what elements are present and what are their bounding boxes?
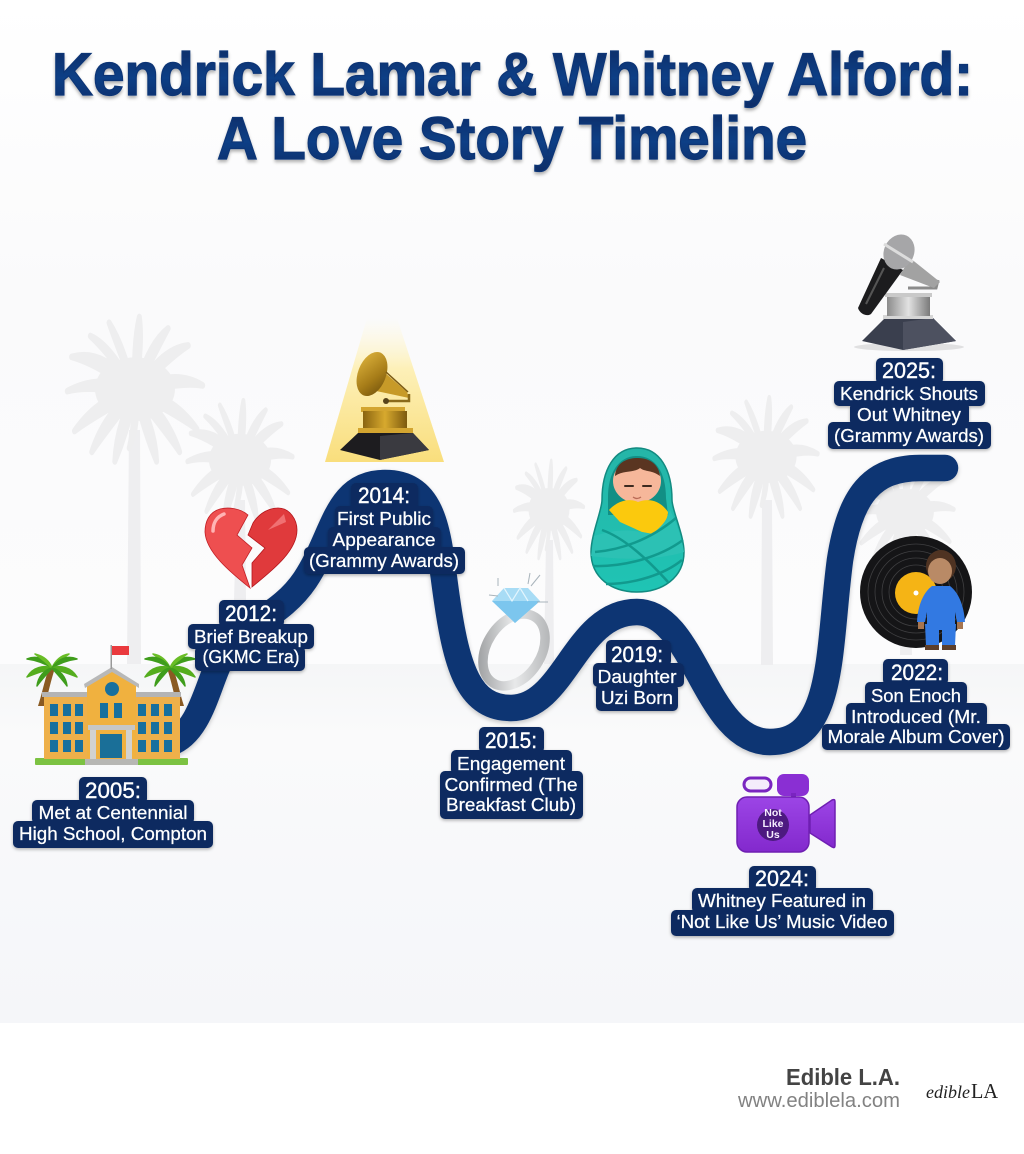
entrance portico [88, 725, 135, 730]
hood opening [608, 456, 668, 515]
label: 2019 [593, 640, 684, 711]
grass [35, 758, 188, 765]
child figure [917, 550, 965, 650]
badge text: Not [764, 807, 782, 819]
ring band [470, 603, 558, 697]
windows right [138, 704, 172, 752]
year: 2012: [225, 601, 277, 626]
badge text: Like [762, 818, 784, 830]
badge text: Us [766, 829, 780, 841]
pyramid base [862, 318, 956, 350]
label: 2025 [828, 358, 991, 449]
camera body [737, 797, 809, 852]
line: Daughter [598, 666, 676, 687]
icon: purple video camera, 2024 [737, 774, 835, 852]
line: ‘Not Like Us’ Music Video [676, 911, 888, 932]
blanket folds [591, 510, 684, 559]
vinyl disc [860, 536, 972, 648]
background palm trees [67, 317, 954, 665]
icon: vinyl record with child, 2022 [860, 536, 972, 650]
line: (Grammy Awards) [309, 550, 459, 571]
icon: silver grammy with microphone, 2025 [854, 229, 964, 351]
palm tree 2 [187, 401, 293, 600]
palm tree 3 [514, 461, 584, 664]
label: 2015 [440, 727, 583, 819]
icon: broken heart, 2012 [205, 508, 297, 588]
line: Introduced (Mr. [851, 706, 981, 727]
line: Breakfast Club) [446, 794, 576, 815]
line: Engagement [457, 753, 565, 774]
spotlight beam [325, 318, 444, 462]
central tower [87, 669, 136, 758]
school palm right [145, 654, 195, 706]
windows left [50, 704, 83, 752]
year: 2014: [358, 483, 410, 508]
line: Out Whitney [857, 404, 962, 425]
yellow onesie [609, 500, 668, 534]
year: 2022: [891, 660, 943, 685]
year: 2005: [85, 778, 141, 803]
camera oval [744, 778, 771, 791]
year: 2019: [611, 642, 663, 667]
footer logo letters: LA [971, 1079, 999, 1103]
diamond [492, 588, 540, 623]
palm tree 4 [714, 398, 818, 665]
title line 2: A Love Story Timeline [217, 105, 807, 172]
icon: school building, 2005 [27, 645, 195, 765]
line: Kendrick Shouts [840, 383, 978, 404]
line: Morale Album Cover) [828, 726, 1004, 747]
line: Brief Breakup [194, 626, 308, 647]
microphone [858, 229, 920, 315]
year: 2025: [882, 358, 936, 383]
footer branding [737, 1064, 999, 1112]
line: First Public [337, 508, 431, 529]
label: 2022 [822, 659, 1010, 750]
school palm left [27, 654, 77, 706]
title line 1: Kendrick Lamar & Whitney Alford: [52, 41, 973, 108]
label: 2012 [188, 600, 314, 671]
arm and horn [908, 280, 938, 288]
palm tree 5 [856, 459, 954, 655]
line: Uzi Born [601, 687, 673, 708]
footer site name: Edible L.A. [786, 1064, 900, 1090]
background: lower ground band [0, 664, 1024, 1023]
camera lens triangle [810, 800, 835, 848]
camera top reel [777, 774, 809, 796]
background: upper sky [0, 0, 1024, 664]
wings [44, 692, 180, 759]
lens badge [757, 809, 789, 841]
year: 2015: [485, 728, 537, 753]
label: 2005 [13, 777, 213, 848]
line: Confirmed (The [444, 774, 578, 795]
sparkles [489, 573, 548, 602]
timeline ribbon path [170, 468, 945, 743]
footer logo mark: edible [926, 1082, 970, 1102]
title [52, 41, 973, 172]
footer url: www.ediblela.com [737, 1090, 900, 1112]
baby face [613, 459, 661, 503]
icon: swaddled baby, 2019 [591, 448, 684, 592]
silver box [887, 296, 930, 316]
palm tree 1 [67, 317, 203, 664]
line: (GKMC Era) [202, 646, 300, 667]
vinyl label [895, 572, 937, 614]
year: 2024: [755, 866, 809, 891]
line: Appearance [332, 529, 436, 550]
icon: diamond ring, 2015 [470, 573, 558, 697]
line: (Grammy Awards) [834, 425, 984, 446]
line: Met at Centennial [38, 802, 188, 823]
label: 2014 [304, 483, 465, 574]
line: Whitney Featured in [698, 890, 866, 911]
label: 2024 [671, 866, 894, 936]
line: High School, Compton [19, 823, 207, 844]
icon: gold gramophone in spotlight, 2014 [325, 318, 444, 462]
gold trophy [340, 348, 429, 460]
flag [110, 645, 112, 669]
line: Son Enoch [871, 685, 961, 706]
